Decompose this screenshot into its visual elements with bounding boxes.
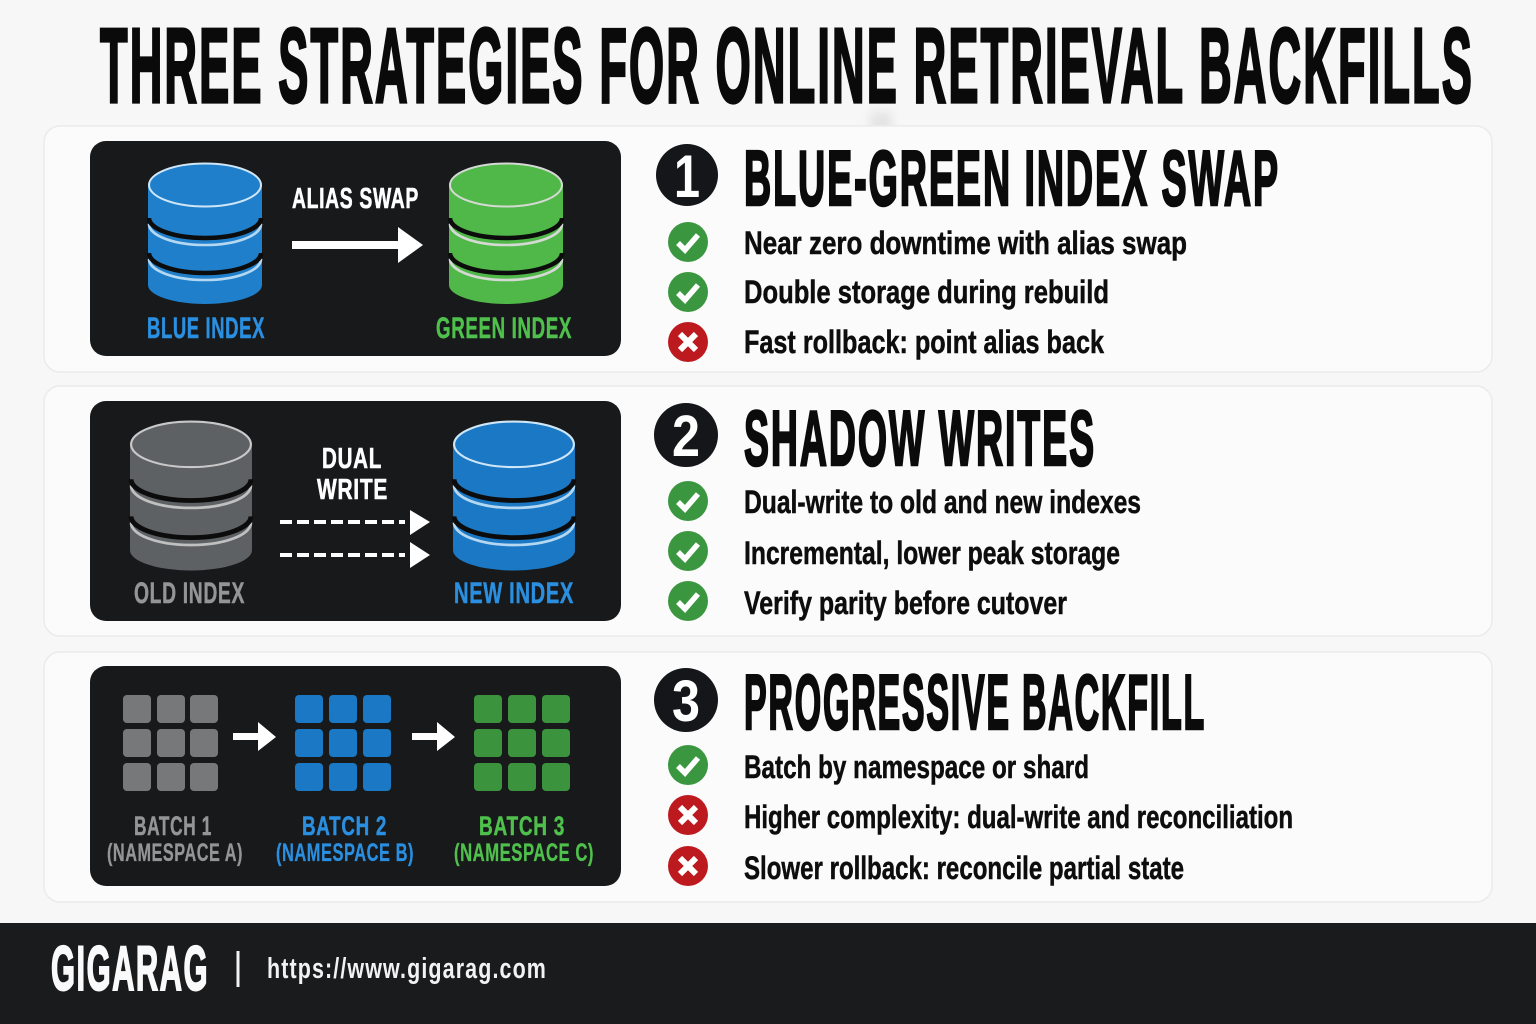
bullet: dual-write — [668, 481, 1141, 521]
bullet: near zero downtime — [668, 222, 1187, 262]
label: batch 3: (NAMESPACE C) — [454, 839, 594, 867]
label: new index: NEW INDEX — [454, 577, 574, 610]
bullet: higher complexity — [668, 795, 1293, 835]
icon: blue index database — [148, 164, 262, 304]
bullet: fast rollback — [668, 322, 1104, 362]
number badge 3: 3 — [672, 669, 700, 734]
label: batch 2: BATCH 2 — [302, 811, 387, 841]
bullet: near zero downtime: Near zero downtime with alias swap — [744, 225, 1187, 261]
number badge 2 — [654, 403, 718, 469]
bullet: incremental — [668, 531, 1120, 571]
diagram: batches — [90, 666, 621, 886]
icon: batch 1 grid — [123, 695, 218, 791]
label: blue index: BLUE INDEX — [147, 312, 265, 345]
icon: batch 3 grid — [474, 695, 570, 791]
footer — [0, 923, 1536, 1024]
bullet: incremental: Incremental, lower peak storage — [744, 535, 1120, 571]
icon: green index database — [449, 164, 563, 304]
panel: blue-green index swap — [44, 126, 1492, 372]
number badge 1: 1 — [674, 143, 700, 210]
icon: new index database — [453, 422, 575, 570]
bullet: batch by namespace — [668, 745, 1089, 785]
bullet: verify parity — [668, 581, 1067, 621]
icon: batch 2 grid — [295, 695, 391, 791]
bullet: double storage: Double storage during rebuild — [744, 274, 1109, 310]
label: dual write: DUAL — [322, 443, 382, 475]
arrow: batch 1 to 2 — [233, 722, 276, 751]
arrow: dashed upper — [280, 510, 430, 535]
label: dual write: WRITE — [317, 474, 388, 506]
number badge 2: 2 — [672, 404, 700, 469]
label: old index: OLD INDEX — [134, 577, 245, 610]
bullet: verify parity: Verify parity before cutover — [744, 585, 1067, 621]
arrow: alias swap — [292, 227, 423, 263]
label: batch 3: BATCH 3 — [479, 811, 565, 841]
label: batch 2: (NAMESPACE B) — [276, 839, 414, 867]
label: batch 1: (NAMESPACE A) — [107, 839, 243, 867]
label: alias swap: ALIAS SWAP — [292, 183, 419, 215]
label: batch 2 — [276, 811, 414, 867]
arrow: batch 2 to 3 — [412, 722, 455, 751]
bullet: fast rollback: Fast rollback: point alias back — [744, 324, 1104, 360]
number badge 3 — [654, 668, 718, 734]
label: dual write — [317, 443, 388, 506]
bullet: double storage — [668, 272, 1109, 312]
bullet: higher complexity: Higher complexity: dual-write and reconciliation — [744, 799, 1293, 835]
bullet: dual-write: Dual-write to old and new indexes — [744, 484, 1141, 520]
bullet: slower rollback: Slower rollback: reconcile partial state — [744, 850, 1184, 886]
icon: old index database — [130, 422, 252, 570]
number badge 1 — [656, 143, 718, 210]
footer url: https://www.gigarag.com — [267, 953, 547, 985]
footer: GIGARAG — [51, 934, 209, 1004]
label: green index: GREEN INDEX — [436, 312, 572, 345]
panel: shadow writes — [44, 386, 1492, 636]
label: batch 1: BATCH 1 — [134, 811, 212, 841]
label: batch 3 — [454, 811, 594, 867]
bullet: slower rollback — [668, 846, 1184, 886]
label: batch 1 — [107, 811, 243, 867]
diagram: dual write — [90, 401, 621, 621]
footer divider — [236, 951, 240, 987]
diagram: alias swap — [90, 141, 621, 356]
panel: shadow writes: SHADOW WRITES — [744, 394, 1096, 482]
arrow: dashed lower — [280, 542, 430, 568]
bullet: batch by namespace: Batch by namespace or shard — [744, 749, 1089, 785]
panel: progressive backfill — [44, 652, 1492, 902]
